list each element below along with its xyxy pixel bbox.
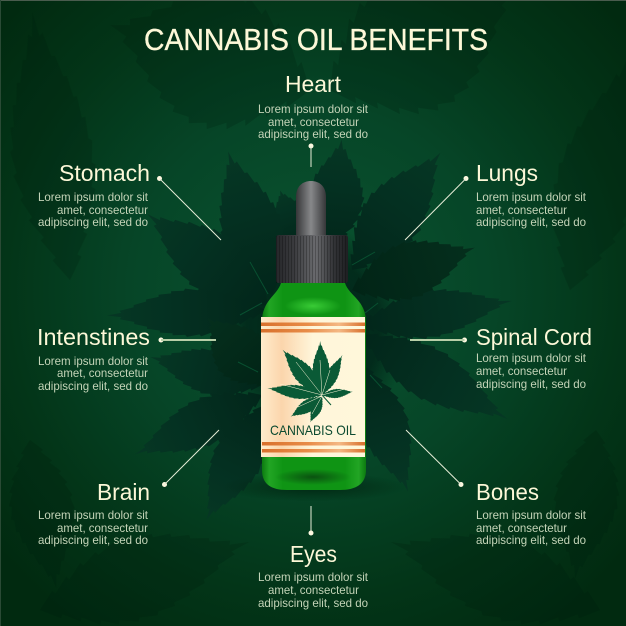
label text: CANNABIS OIL xyxy=(270,422,356,438)
heart callout: adipiscing elit, sed do xyxy=(258,127,368,141)
dropper bulb xyxy=(296,181,326,236)
intestines callout: amet, consectetur xyxy=(57,366,148,380)
stomach callout: Lorem ipsum dolor sit xyxy=(38,190,149,204)
spinal cord callout: Lorem ipsum dolor sit xyxy=(476,351,587,365)
dropper cap xyxy=(276,235,348,283)
stomach callout: adipiscing elit, sed do xyxy=(38,215,148,229)
spinal cord callout: amet, consectetur xyxy=(476,364,567,378)
glass body xyxy=(262,283,366,490)
bones callout: adipiscing elit, sed do xyxy=(476,533,586,547)
heart callout xyxy=(258,71,369,167)
heart callout: Lorem ipsum dolor sit xyxy=(258,102,369,116)
brain callout: Brain xyxy=(97,479,150,505)
bones callout: Bones xyxy=(476,479,539,505)
icon: label cannabis leaf xyxy=(267,341,353,425)
eyes callout xyxy=(258,506,369,610)
central cannabis leaf xyxy=(106,134,521,531)
lungs callout: adipiscing elit, sed do xyxy=(476,215,586,229)
brain callout xyxy=(38,430,219,547)
bottle xyxy=(221,181,405,501)
spinal cord callout xyxy=(410,324,592,391)
stomach callout: Stomach xyxy=(59,160,150,186)
intestines callout: adipiscing elit, sed do xyxy=(38,379,148,393)
intestines callout: Intenstines xyxy=(37,324,150,350)
title: CANNABIS OIL BENEFITS xyxy=(144,22,488,57)
eyes callout: adipiscing elit, sed do xyxy=(258,596,368,610)
bones callout: amet, consectetur xyxy=(476,521,567,535)
heart callout: amet, consectetur xyxy=(268,115,359,129)
stomach callout: amet, consectetur xyxy=(57,203,148,217)
bones callout: Lorem ipsum dolor sit xyxy=(476,508,587,522)
intestines callout: Lorem ipsum dolor sit xyxy=(38,354,149,368)
lungs callout: Lorem ipsum dolor sit xyxy=(476,190,587,204)
spinal cord callout: Spinal Cord xyxy=(476,324,592,350)
lungs callout xyxy=(405,160,587,240)
brain callout: amet, consectetur xyxy=(57,521,148,535)
stomach callout xyxy=(38,160,221,240)
eyes callout: Lorem ipsum dolor sit xyxy=(258,570,369,584)
bones callout xyxy=(406,430,587,547)
spinal cord callout: adipiscing elit, sed do xyxy=(476,377,586,391)
lungs callout: Lungs xyxy=(476,160,538,186)
heart callout: Heart xyxy=(285,71,342,97)
lungs callout: amet, consectetur xyxy=(476,203,567,217)
eyes callout: Eyes xyxy=(290,541,337,567)
brain callout: Lorem ipsum dolor sit xyxy=(38,508,149,522)
brain callout: adipiscing elit, sed do xyxy=(38,533,148,547)
eyes callout: amet, consectetur xyxy=(268,583,359,597)
intestines callout xyxy=(37,324,216,393)
bottle label xyxy=(261,317,365,457)
